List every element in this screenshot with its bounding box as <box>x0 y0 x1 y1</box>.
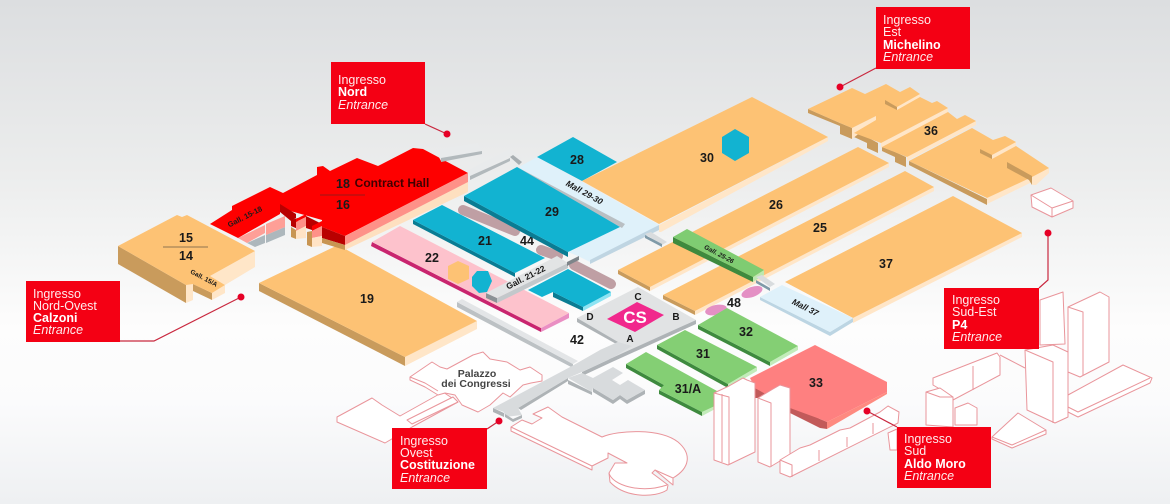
callout: Sud-Est P4: Ingresso <box>952 293 1000 307</box>
callout: Sud Aldo Moro: Entrance <box>904 469 954 483</box>
callout: Nord entrance: Ingresso <box>338 73 386 87</box>
walkway at north <box>435 143 522 180</box>
callout: Est Michelino: Entrance <box>883 50 933 64</box>
callout: Est Michelino: Michelino <box>883 38 941 52</box>
hall 18/16 contract hall: 16 <box>336 198 350 212</box>
hall 15/14: 15 <box>179 231 193 245</box>
pink ovals 48: 48 <box>727 296 741 310</box>
callout: Est Michelino: Est <box>883 25 902 39</box>
hexagon icon: orange <box>448 261 469 284</box>
callout: Nord entrance: Nord <box>338 85 367 99</box>
hall 29: 29 <box>545 205 559 219</box>
hall 33 <box>750 345 887 429</box>
palazzo label <box>441 368 511 390</box>
callout: Sud Aldo Moro: Ingresso <box>904 432 952 446</box>
hall 32: 32 <box>739 325 753 339</box>
CS block <box>493 287 696 422</box>
gallery 25-26 <box>645 229 764 282</box>
callout: Sud Aldo Moro: Sud <box>904 444 926 458</box>
callout: Sud-Est P4: Entrance <box>952 330 1002 344</box>
small outline building NE <box>1031 188 1073 217</box>
CS block: B <box>672 312 680 323</box>
callout: Ovest Costituzione: Ovest <box>400 446 433 460</box>
callout: Nord entrance <box>331 62 450 138</box>
callout: Nord entrance: Entrance <box>338 98 388 112</box>
corridor 42 walkway <box>457 299 578 368</box>
gallery 21-22: Gall. 21-22 <box>504 263 547 291</box>
hall 29 <box>464 167 620 257</box>
CS block: 42 <box>570 333 584 347</box>
outline buildings: palazzo dei congressi group <box>337 352 687 495</box>
palazzo label: Palazzo <box>458 368 496 380</box>
hall 25 <box>663 171 934 315</box>
pills 44 <box>463 210 611 284</box>
hall 37: 37 <box>879 257 893 271</box>
mall 37: Mall 37 <box>790 296 821 319</box>
hall 19: 19 <box>360 292 374 306</box>
hall 36 <box>808 84 1049 205</box>
hall 33: 33 <box>809 376 823 390</box>
callout: Nord-Ovest Calzoni: Nord-Ovest <box>33 299 97 313</box>
hall 31/A <box>626 352 717 416</box>
callout: Sud-Est P4 <box>944 230 1052 349</box>
hall 22 pink: 22 <box>425 251 439 265</box>
gallery 25-26: Gall. 25-26 <box>703 244 735 266</box>
hall 30: 30 <box>700 151 714 165</box>
hall 32 <box>698 308 798 366</box>
hall 31/A: 31/A <box>675 382 701 396</box>
hall 18/16 contract hall: Gall. 15-18 <box>226 204 264 229</box>
hall 15/14: 14 <box>179 249 193 263</box>
callout: Sud-Est P4: P4 <box>952 318 967 332</box>
callout: Nord-Ovest Calzoni <box>26 281 244 342</box>
callout: Nord-Ovest Calzoni: Entrance <box>33 323 83 337</box>
CS block: A <box>626 334 634 345</box>
hall 21 <box>413 205 611 311</box>
hall 15/14: Gall. 15/A <box>189 269 219 289</box>
CS block: D <box>586 312 594 323</box>
hall 19 <box>259 245 477 366</box>
hall 30 <box>582 97 828 232</box>
pink ovals 48 <box>704 284 764 317</box>
hall 18/16 contract hall <box>210 148 468 250</box>
callout: Nord-Ovest Calzoni: Calzoni <box>33 311 77 325</box>
hall 28: 28 <box>570 153 584 167</box>
callout: Sud Aldo Moro: Aldo Moro <box>904 457 966 471</box>
hall 21: 21 <box>478 234 492 248</box>
callout: Ovest Costituzione: Costituzione <box>400 458 475 472</box>
CS block: CS <box>623 308 647 327</box>
hall 18/16 contract hall: 18 <box>336 177 350 191</box>
mall 37 <box>756 275 853 336</box>
mall 29-30 <box>517 157 659 264</box>
callout: Sud Aldo Moro <box>864 408 991 488</box>
callout: Ovest Costituzione: Entrance <box>400 471 450 485</box>
mall 29-30: Mall 29-30 <box>564 178 605 207</box>
hall 26 <box>618 147 889 291</box>
pills 44: 44 <box>520 234 534 248</box>
callout: Nord-Ovest Calzoni: Ingresso <box>33 287 81 301</box>
walkway to west <box>493 342 645 422</box>
hall 31: 31 <box>696 347 710 361</box>
CS block: C <box>634 292 642 303</box>
hall 26: 26 <box>769 198 783 212</box>
hall 28 <box>537 137 617 181</box>
hall 15/14 <box>118 215 255 303</box>
callout: Est Michelino: Ingresso <box>883 13 931 27</box>
hexagon icon: blue in 22 <box>472 271 492 293</box>
callout: Sud-Est P4: Sud-Est <box>952 305 997 319</box>
hall 18/16 contract hall: Contract Hall <box>355 176 429 190</box>
outline buildings: south-east towers <box>714 292 1152 477</box>
gallery 21-22 <box>486 256 579 303</box>
palazzo label: dei Congressi <box>441 378 511 390</box>
hall 25: 25 <box>813 221 827 235</box>
hall 31 <box>657 330 757 388</box>
hall 37 <box>785 196 1022 323</box>
hall 22 pink <box>371 226 569 332</box>
callout: Est Michelino <box>836 7 970 90</box>
callout: Ovest Costituzione <box>392 418 502 489</box>
callout: Ovest Costituzione: Ingresso <box>400 434 448 448</box>
hall 36: 36 <box>924 124 938 138</box>
